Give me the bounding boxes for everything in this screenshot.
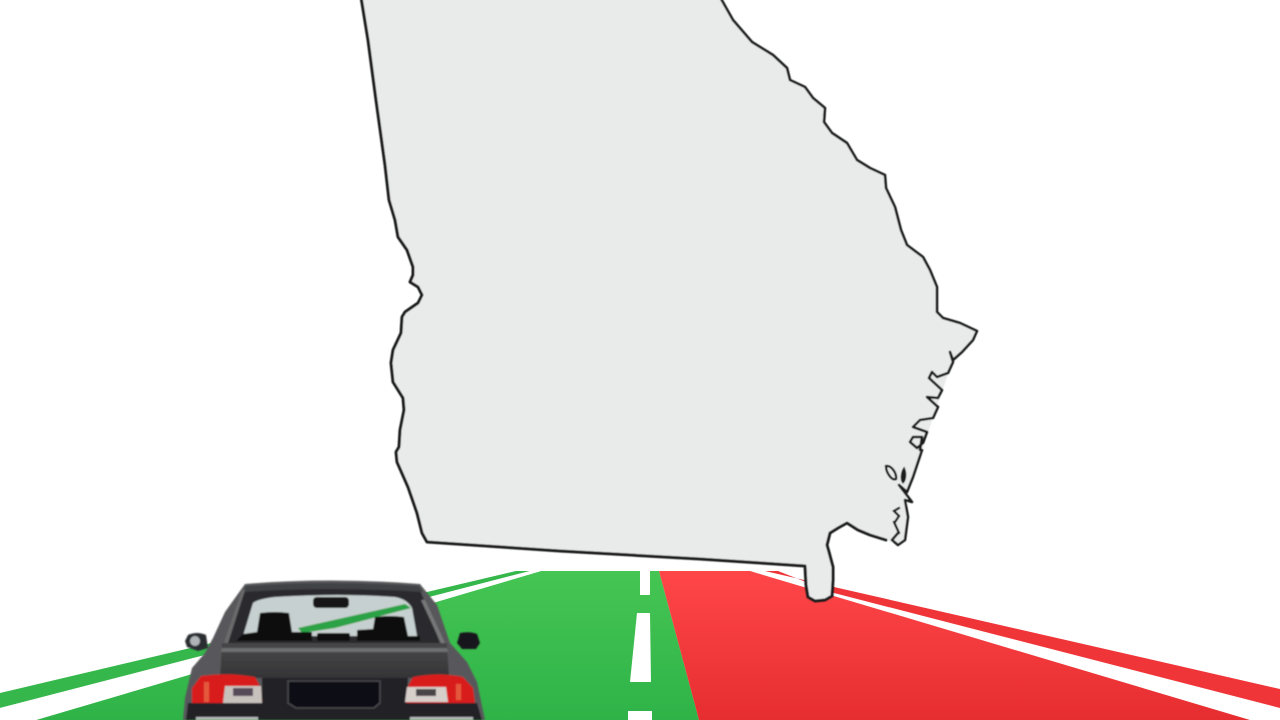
roof and rear window frame <box>226 584 440 643</box>
green stripe seen through window <box>298 604 411 633</box>
map: Georgia state outline <box>361 0 977 601</box>
roof strip <box>243 583 423 592</box>
coastal inlets <box>886 466 905 533</box>
red road lane <box>659 571 1280 720</box>
left pillar highlight <box>224 590 245 643</box>
licence plate recess <box>288 681 380 708</box>
bumper highlights <box>196 717 473 720</box>
left tail light <box>192 674 262 703</box>
right pillar highlight <box>421 600 445 643</box>
lower bumper panel <box>186 678 482 720</box>
rear window glass <box>243 595 417 636</box>
car: rear view <box>183 580 485 720</box>
trunk lid <box>220 643 449 681</box>
rear-view mirror <box>313 597 349 608</box>
side mirrors <box>185 632 480 651</box>
right tail light <box>405 674 475 703</box>
green road lane <box>0 571 699 720</box>
centre lane dashes <box>628 571 652 720</box>
seats <box>236 612 420 641</box>
car body <box>183 580 485 720</box>
